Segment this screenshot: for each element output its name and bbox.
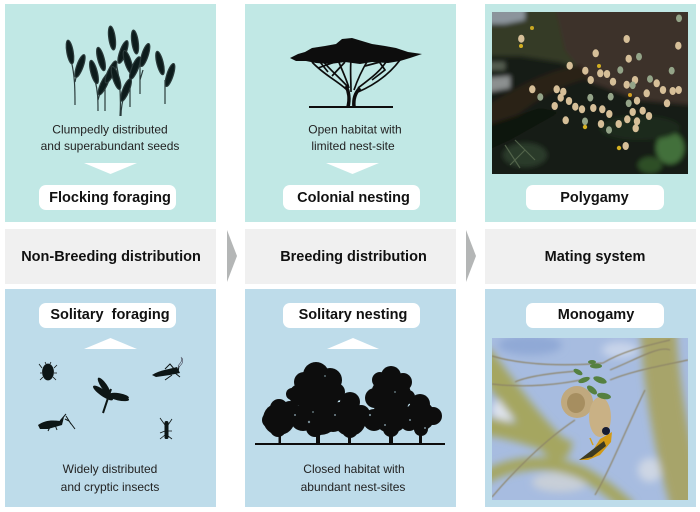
band: non-breeding distribution <box>5 229 216 284</box>
text: insects description: Widely distributed <box>63 462 157 476</box>
label: monogamy: Monogamy <box>558 307 634 323</box>
band: breeding distribution: Breeding distribution <box>280 249 427 265</box>
text: open habitat description: limited nest-site <box>311 139 395 153</box>
band: breeding distribution <box>245 229 456 284</box>
label: colonial nesting <box>283 185 420 210</box>
arrow: down to flocking foraging <box>84 163 137 174</box>
label: colonial nesting: Colonial nesting <box>297 190 410 206</box>
panel: open habitat <box>245 4 456 222</box>
panel: closed habitat <box>245 289 456 507</box>
arrow: grey right 1 <box>227 230 237 282</box>
band: mating system: Mating system <box>545 249 645 265</box>
label: solitary nesting: Solitary nesting <box>299 307 407 323</box>
label: solitary foraging <box>39 303 176 328</box>
icon: mantis <box>38 414 75 431</box>
icon: wheat stalks <box>65 26 177 116</box>
panel: polygamy <box>485 4 696 222</box>
arrow: up from trees <box>327 338 379 349</box>
icon: forest silhouette <box>255 362 445 445</box>
panel: clumped seeds <box>5 4 216 222</box>
icon: beetle <box>39 362 57 380</box>
yellow weaver bird <box>579 427 612 460</box>
label: monogamy <box>526 303 664 328</box>
label: flocking foraging: Flocking foraging <box>49 190 171 206</box>
icon: dragonfly <box>91 376 130 413</box>
text: closed habitat description: abundant nest-sites <box>301 480 405 494</box>
arrow: up from insects <box>84 338 137 349</box>
label: solitary foraging: Solitary foraging <box>50 307 170 323</box>
band: non-breeding distribution: Non-Breeding distribution <box>21 249 201 265</box>
text: insects description: and cryptic insects <box>61 480 159 494</box>
arrow: grey right 2 <box>466 230 476 282</box>
label: polygamy <box>526 185 664 210</box>
panel: cryptic insects <box>5 289 216 507</box>
band: mating system <box>485 229 696 284</box>
label: flocking foraging <box>39 185 176 210</box>
label: polygamy: Polygamy <box>560 190 629 206</box>
photo: weaver and nest <box>492 338 688 500</box>
panel: monogamy <box>480 289 696 510</box>
text: closed habitat description: Closed habitat with <box>303 462 405 476</box>
arrow: down to colonial nesting <box>326 163 379 174</box>
photo: colony of nests in acacia <box>492 12 688 174</box>
label: solitary nesting <box>283 303 420 328</box>
text: seeds description: and superabundant seeds <box>41 139 179 153</box>
icon: acacia tree <box>290 38 422 108</box>
icon: ant bug <box>160 418 172 439</box>
text: open habitat description: Open habitat with <box>308 122 402 136</box>
nest and leaves <box>561 360 611 437</box>
icon: grasshopper <box>152 357 183 380</box>
nests <box>518 14 682 150</box>
text: seeds description: Clumpedly distributed <box>52 122 168 136</box>
